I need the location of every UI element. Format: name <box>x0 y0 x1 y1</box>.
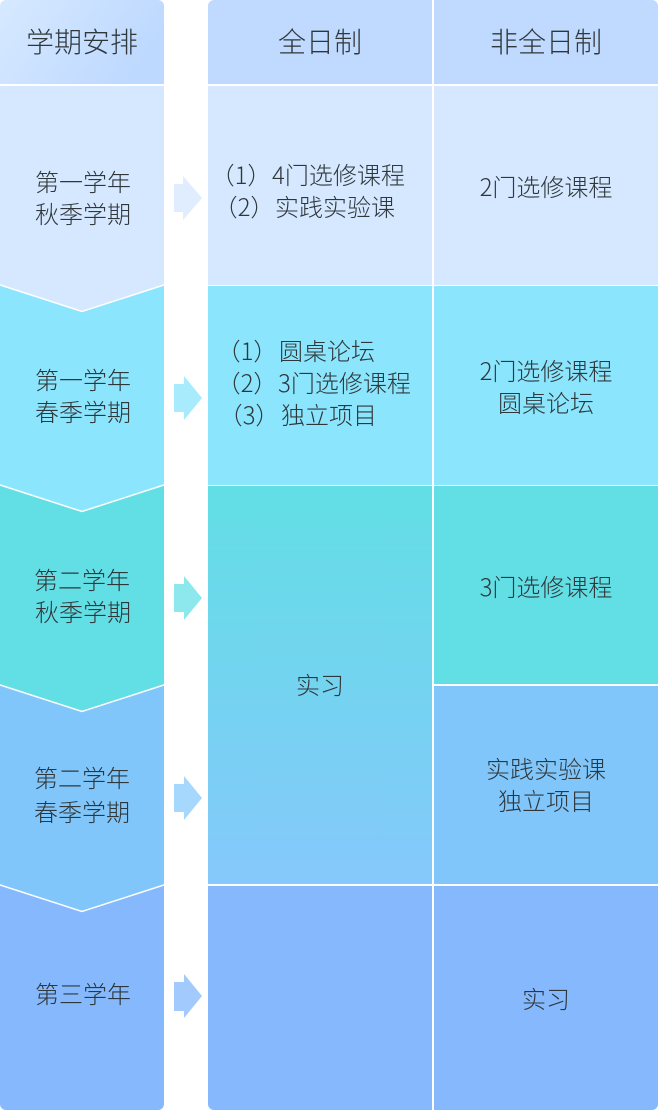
header: part-time: 非全日制 <box>490 21 602 61</box>
part-time: second year spring <box>434 686 658 884</box>
full-time: first year spring <box>208 286 432 485</box>
full-time: internship, second year: 实习 <box>296 666 344 701</box>
part-time: second year spring: 独立项目 <box>498 782 594 817</box>
segment: first year spring: 春季学期 <box>35 393 131 428</box>
arrow: first year spring <box>174 376 202 420</box>
part-time: third year <box>434 886 658 1110</box>
full-time: first year autumn: （2） <box>214 188 274 223</box>
segment: first year spring: 第一学年 <box>35 361 131 396</box>
full-time: first year autumn: 4门选修课程 <box>272 156 405 191</box>
segment: first year autumn: 秋季学期 <box>35 195 131 230</box>
full-time: first year spring: （3） <box>219 396 279 431</box>
arrow: second year spring <box>174 776 202 820</box>
full-time: first year spring: （1） <box>217 332 277 367</box>
segment: third year <box>0 880 164 1110</box>
part-time: first year spring <box>434 286 658 485</box>
part-time: first year autumn: 2门选修课程 <box>480 168 612 203</box>
segment: first year autumn <box>0 86 166 312</box>
arrow: first year autumn <box>174 176 202 220</box>
part-time: first year spring: 圆桌论坛 <box>498 384 594 419</box>
segment: second year autumn <box>0 480 166 712</box>
segment: second year spring <box>0 680 166 912</box>
part-time: second year autumn <box>434 486 658 684</box>
header: full-time <box>208 0 432 84</box>
segment: first year autumn: 第一学年 <box>35 163 131 198</box>
segment: first year spring <box>0 280 166 512</box>
part-time: first year autumn <box>434 86 658 285</box>
full-time: first year spring: 3门选修课程 <box>278 364 411 399</box>
full-time: first year autumn <box>208 86 432 285</box>
segment: third year: 第三学年 <box>35 975 131 1010</box>
full-time: third year, empty <box>208 886 432 1110</box>
header: semester schedule: 学期安排 <box>26 21 138 61</box>
segment: second year spring: 第二学年 <box>34 759 130 794</box>
full-time: first year spring: 独立项目 <box>281 396 377 431</box>
part-time: second year spring: 实践实验课 <box>486 750 606 785</box>
full-time: internship, second year <box>208 486 432 884</box>
header: semester schedule <box>0 0 164 84</box>
segment: second year autumn: 第二学年 <box>34 561 130 596</box>
full-time: first year spring: 圆桌论坛 <box>279 332 375 367</box>
header: part-time <box>434 0 658 84</box>
schedule table <box>208 0 658 1110</box>
full-time: first year spring: （2） <box>217 364 277 399</box>
segment: second year autumn: 秋季学期 <box>35 593 131 628</box>
arrow: third year <box>174 974 202 1018</box>
header: full-time: 全日制 <box>278 21 362 61</box>
arrow: second year autumn <box>174 576 202 620</box>
part-time: third year: 实习 <box>522 980 570 1015</box>
left column: semester schedule <box>0 0 166 1110</box>
segment: second year spring: 春季学期 <box>34 793 130 828</box>
part-time: second year autumn: 3门选修课程 <box>480 568 612 603</box>
full-time: first year autumn: （1） <box>211 156 271 191</box>
full-time: first year autumn: 实践实验课 <box>275 188 395 223</box>
part-time: first year spring: 2门选修课程 <box>480 352 612 387</box>
